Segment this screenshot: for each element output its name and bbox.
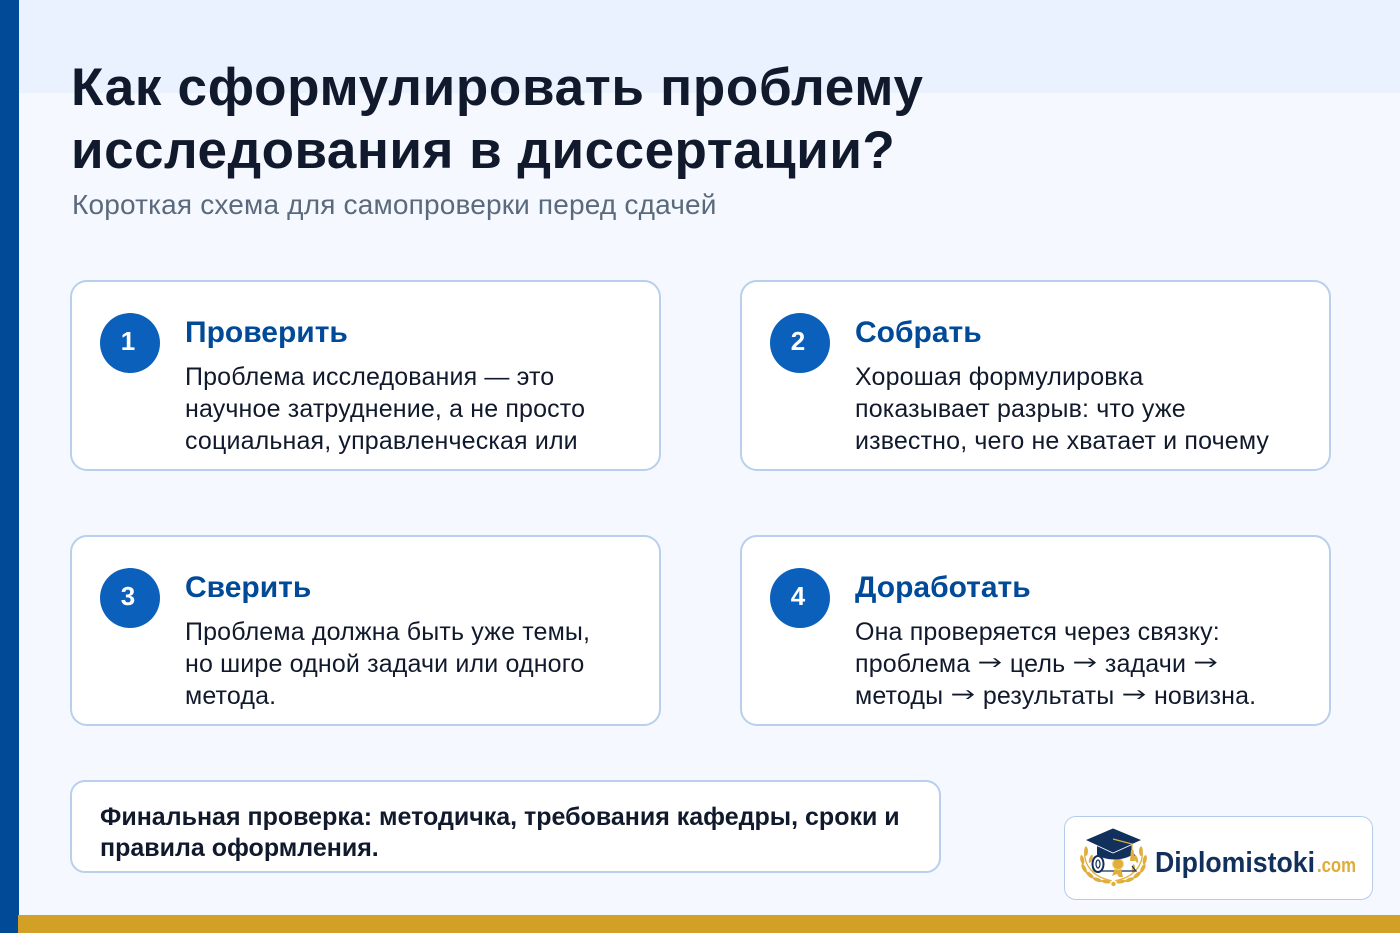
logo artwork <box>1080 828 1356 886</box>
left sidebar stripe <box>0 0 19 933</box>
final check text: Финальная проверка: методичка, требования кафедры, сроки и <box>100 803 900 831</box>
subtitle: Короткая схема для самопроверки перед сдачей <box>72 189 717 220</box>
step 4 text: Она проверяется через связку: <box>855 618 1220 646</box>
panel: final check box <box>70 780 941 873</box>
icon: right laurel branch <box>1115 846 1148 884</box>
step 1 heading: Проверить <box>185 316 348 349</box>
panel: step 2 card <box>740 280 1331 471</box>
step 2 text: Хорошая формулировка <box>855 363 1143 391</box>
step 2 text: показывает разрыв: что уже <box>855 395 1186 423</box>
step 4 number badge: 4 <box>791 581 805 611</box>
logo card <box>1064 816 1373 900</box>
step 1 text: социальная, управленческая или <box>185 427 578 455</box>
step 4 text: проблема → цель → задачи → <box>855 650 1219 678</box>
step 1 text: научное затруднение, а не просто <box>185 395 585 423</box>
step 3 text: Проблема должна быть уже темы, <box>185 618 590 646</box>
title: исследования в диссертации? <box>71 121 895 180</box>
step 3 number badge <box>100 568 160 628</box>
step 3 text: метода. <box>185 682 276 710</box>
step 1 text: Проблема исследования — это <box>185 363 554 391</box>
step 1 number badge: 1 <box>121 326 135 356</box>
step 2 text <box>855 363 1269 455</box>
step 1 number badge <box>100 313 160 373</box>
step 2 number badge: 2 <box>791 326 805 356</box>
panel: step 4 card <box>740 535 1331 726</box>
logo wordmark: Diplomistoki <box>1155 847 1315 879</box>
icon: graduation cap <box>1085 828 1142 861</box>
step 4 text: методы → результаты → новизна. <box>855 682 1256 710</box>
step 3 heading: Сверить <box>185 571 311 604</box>
step 2 heading: Собрать <box>855 316 982 349</box>
bottom gold bar <box>18 915 1400 933</box>
title: Как сформулировать проблему <box>71 58 924 117</box>
top header band <box>0 0 1400 93</box>
step 4 number badge <box>770 568 830 628</box>
step 1 text <box>185 363 585 455</box>
step 3 text <box>185 618 590 710</box>
step 2 text: известно, чего не хватает и почему <box>855 427 1269 455</box>
step 3 number badge: 3 <box>121 581 135 611</box>
icon: wreath dot <box>1111 882 1116 886</box>
final check text: правила оформления. <box>100 834 379 862</box>
step 4 text <box>855 618 1256 710</box>
panel: step 1 card <box>70 280 661 471</box>
step 4 heading: Доработать <box>855 571 1031 604</box>
icon: diploma scroll <box>1092 855 1136 877</box>
step 2 number badge <box>770 313 830 373</box>
logo domain: .com <box>1317 855 1356 877</box>
final check text <box>100 803 900 862</box>
panel: step 3 card <box>70 535 661 726</box>
icon: left laurel branch <box>1079 846 1112 884</box>
step 3 text: но шире одной задачи или одного <box>185 650 584 678</box>
title <box>71 58 924 180</box>
